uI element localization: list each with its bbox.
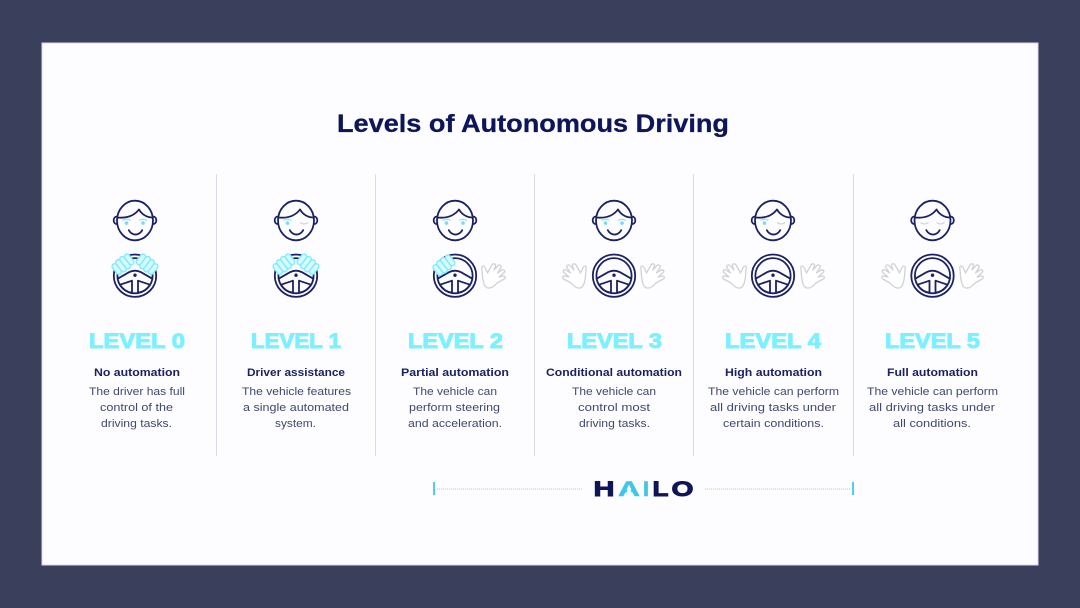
icon: driver face, one eye closed — [275, 201, 317, 240]
subheading: partial automation: Partial automation — [401, 367, 509, 379]
text block: level 5 description: all conditions. — [893, 418, 971, 430]
logo: Hailo — [594, 478, 694, 501]
icon: released right hand — [482, 264, 505, 288]
icon: driver face, eyes on road — [434, 201, 476, 240]
heading: level 2: LEVEL 2 — [408, 330, 503, 353]
text block: level 5 description: all driving tasks under — [869, 402, 995, 414]
logo: Hailo: I — [643, 478, 649, 501]
subheading: driver assistance: Driver assistance — [247, 367, 345, 379]
subheading: full automation: Full automation — [887, 367, 978, 379]
icon: released left hand — [882, 264, 905, 288]
icon: wheel with one hand gripping — [431, 253, 476, 297]
text block: level 3 description: driving tasks. — [579, 418, 650, 430]
text block: level 4 description: certain conditions. — [723, 418, 824, 430]
subheading: conditional automation: Conditional automation — [546, 367, 682, 379]
panel: level 3 — [546, 201, 682, 430]
panel: level 0 — [89, 201, 185, 430]
text block: level 5 description: The vehicle can perform — [867, 386, 998, 398]
panel: white card — [42, 43, 1038, 565]
heading: level 1: LEVEL 1 — [251, 330, 341, 353]
text block: level 1 description: system. — [275, 418, 316, 430]
panel: level 4 — [708, 201, 839, 430]
heading: level 3: LEVEL 3 — [567, 330, 662, 353]
subheading: high automation: High automation — [725, 367, 822, 379]
footer: logo rule — [434, 482, 853, 495]
text block: level 3 description: control most — [578, 402, 650, 414]
text block: level 0 description — [89, 386, 185, 430]
text block: level 1 description: a single automated — [243, 402, 349, 414]
icon: driver face, one eye closed — [752, 201, 794, 240]
icon: released left hand — [723, 264, 746, 288]
logo: Hailo: L — [652, 478, 669, 501]
subheading: no automation: No automation — [94, 367, 180, 379]
panel: level 5 — [867, 201, 998, 430]
text block: level 2 description: perform steering — [409, 402, 500, 414]
text block: level 0 description: The driver has full — [89, 386, 185, 398]
heading: level 0: LEVEL 0 — [89, 330, 185, 353]
icon: wheel with both hands gripping — [271, 252, 321, 297]
text block: level 2 description: and acceleration. — [408, 418, 502, 430]
text block: level 1 description — [242, 386, 352, 430]
title: Levels of Autonomous Driving — [337, 110, 729, 138]
text block: level 1 description: The vehicle features — [242, 386, 352, 398]
text block: level 0 description: driving tasks. — [101, 418, 172, 430]
text block: level 4 description: all driving tasks under — [710, 402, 836, 414]
logo: Hailo: A — [618, 478, 640, 501]
icon: released right hand — [960, 264, 983, 288]
icon: free steering wheel — [911, 255, 954, 297]
icon: released right hand — [641, 264, 664, 288]
icon: released right hand — [801, 264, 824, 288]
icon: driver face, both eyes closed — [911, 201, 954, 240]
icon: wheel with both hands gripping — [110, 252, 160, 297]
text block: level 5 description — [867, 386, 998, 430]
heading: level 5: LEVEL 5 — [885, 330, 980, 353]
logo: Hailo: H — [594, 478, 614, 501]
text block: level 0 description: control of the — [100, 402, 173, 414]
icon: free steering wheel — [752, 255, 794, 297]
logo: Hailo: O — [672, 478, 694, 501]
icon: driver face, eyes on road — [593, 201, 635, 240]
icon: released left hand — [563, 264, 586, 288]
panel: level 1 — [242, 201, 352, 430]
icon: driver face, eyes on road — [114, 201, 156, 240]
heading: level 4: LEVEL 4 — [725, 330, 821, 353]
text block: level 4 description: The vehicle can perform — [708, 386, 839, 398]
text block: level 3 description: The vehicle can — [572, 386, 656, 398]
text block: level 2 description: The vehicle can — [413, 386, 497, 398]
text block: level 3 description — [572, 386, 656, 430]
icon: free steering wheel — [593, 255, 635, 297]
text block: level 2 description — [408, 386, 502, 430]
panel: level 2 — [401, 201, 509, 430]
text block: level 4 description — [708, 386, 839, 430]
